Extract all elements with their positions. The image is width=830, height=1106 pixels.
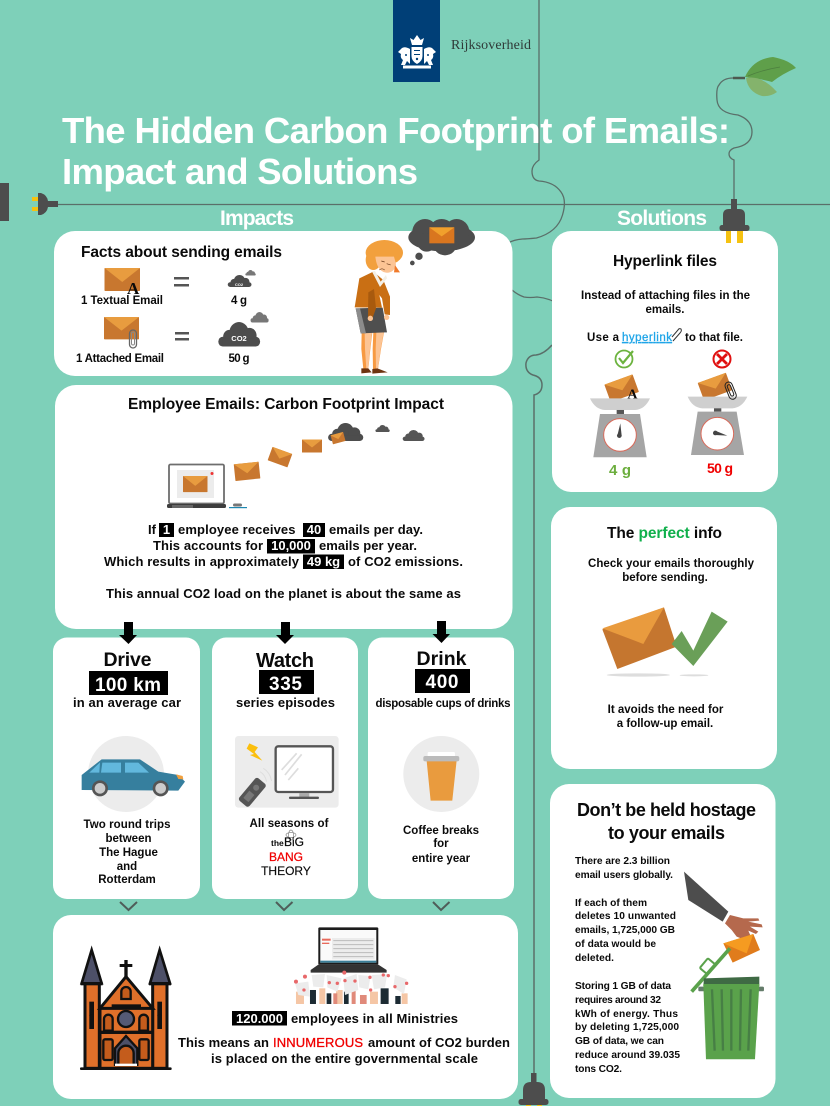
icon: church (80, 950, 172, 1070)
text: email statistics: This annual CO2 load on the planet is about the same as (106, 586, 461, 601)
stat: 335: 335 (269, 674, 302, 695)
text: email data facts: If each of them (575, 898, 647, 909)
title: The Hidden Carbon Footprint of Emails: (62, 110, 730, 151)
panel: drink (368, 638, 514, 899)
text: round trips: Two round trips (84, 819, 170, 831)
panel: employee emails impact (55, 385, 512, 629)
heading: hyperlink files: Hyperlink files (613, 253, 717, 270)
text: round trips: Rotterdam (98, 874, 156, 886)
text: email data facts: deletes 10 unwanted (575, 911, 676, 922)
panel: the perfect info (551, 507, 777, 769)
icon: scale with attached email (688, 373, 747, 455)
text: check emails: Check your emails thoroughly (588, 558, 755, 570)
text: email data facts: by deleting 1,725,000 (575, 1022, 679, 1033)
text: ministries statement: This means an (178, 1035, 269, 1050)
icon: bottom plug (518, 1073, 548, 1106)
text: hyperlink advice: Use a (587, 332, 620, 344)
text: email data facts: deleted. (575, 953, 614, 964)
text: big bang theory: the (271, 838, 284, 848)
text: round trips: and (117, 861, 137, 873)
heading: hostage: to your emails (608, 823, 725, 843)
text: round trips: The Hague (99, 847, 158, 859)
heading: watch: Watch (256, 650, 314, 672)
text: email data facts: email users globally. (575, 870, 673, 881)
text: big bang theory: BANG (269, 850, 303, 864)
heading: drink: Drink (416, 648, 467, 670)
text: avoids follow-up (608, 704, 724, 730)
text: email data facts: Storing 1 GB of data (575, 981, 671, 992)
text: hyperlink advice: hyperlink (622, 332, 672, 344)
text: email statistics: of CO2 emissions. (348, 554, 463, 569)
heading: hostage (577, 800, 756, 843)
text: email statistics: 40 (307, 522, 321, 537)
heading: Impacts: Impacts (220, 207, 294, 230)
text: email statistics: Which results in approximately (104, 554, 300, 569)
row: textual email (81, 268, 256, 307)
arrow: to watch (276, 622, 294, 644)
value: 4 g: 4 g (609, 462, 631, 479)
text: ministries statement: INNUMEROUS (273, 1035, 363, 1050)
text: big bang theory: THEORY (261, 864, 311, 878)
heading: the perfect info: The perfect info (607, 525, 722, 542)
text: ministries statement (178, 1011, 510, 1066)
value: 50 g: 50 g (707, 460, 733, 476)
panel: ministries (53, 915, 518, 1099)
text: round trips (84, 819, 170, 886)
icon: television (235, 736, 339, 808)
icon: coffee cup (403, 736, 479, 812)
text: email data facts: There are 2.3 billion (575, 856, 670, 867)
text: email statistics: If (148, 522, 157, 537)
text: hyperlink advice: to that file. (685, 332, 743, 344)
icon: cross mark (714, 350, 730, 368)
chevron: watch (276, 902, 292, 910)
text: hyperlink advice: Instead of attaching files in the (581, 290, 750, 302)
row: attached email: CO2 (231, 334, 247, 343)
text: email statistics: emails per year. (319, 538, 417, 553)
text: in an average car: in an average car (73, 695, 181, 710)
text: coffee breaks: for (433, 838, 449, 850)
row: textual email: CO2 (235, 282, 244, 287)
icon: laptop (167, 464, 247, 508)
icon: left plug (32, 193, 58, 215)
panel: hyperlink files (552, 231, 778, 492)
illustration: thought cloud (408, 219, 475, 265)
chevron: drive (120, 902, 137, 910)
panel: watch (212, 638, 358, 899)
illustration: hand dropping email into bin (684, 872, 764, 1059)
chevron: drink (433, 902, 450, 910)
stat: 400: 400 (426, 672, 458, 693)
panel: facts about sending emails (54, 219, 512, 376)
icons: clouds (328, 423, 425, 444)
text: email data facts: tons CO2. (575, 1064, 622, 1075)
row: attached email: 50 g (228, 353, 250, 365)
text: coffee breaks: Coffee breaks (403, 825, 479, 837)
text: email statistics: employee receives (178, 522, 296, 537)
arrow: to drink (432, 621, 450, 643)
icon: car (82, 736, 185, 812)
text: ministries statement: amount of CO2 burden (368, 1035, 510, 1050)
row: attached email: 1 Attached Email (76, 353, 164, 365)
stat: 100 km: 100 km (95, 675, 161, 696)
icon: laptop with inbox (311, 927, 387, 973)
text: check emails (588, 558, 755, 584)
text: ministries statement: 120.000 (236, 1011, 283, 1026)
text: email data facts: requires around 32 (575, 995, 661, 1006)
text: ministries statement: employees in all Ministries (291, 1011, 458, 1026)
illustration: worried woman (355, 240, 403, 374)
title: Impact and Solutions (62, 151, 418, 192)
heading: drive: Drive (104, 649, 152, 671)
text: email data facts: reduce around 39.035 (575, 1050, 680, 1061)
text: email statistics: 1 (163, 522, 170, 537)
text: big bang theory: All seasons of (250, 818, 329, 830)
icon: scale with textual email (590, 374, 650, 457)
icon: envelope with check (602, 607, 728, 677)
heading: hostage: Don’t be held hostage (577, 800, 756, 820)
text: big bang theory: BiG (284, 835, 304, 849)
icon: leaf (733, 57, 796, 96)
text: email statistics (104, 522, 463, 601)
stat: 335 (259, 670, 314, 695)
heading: employee emails: Employee Emails: Carbon Footprint Impact (128, 396, 444, 413)
text: round trips: between (105, 833, 152, 845)
row: attached email (76, 312, 269, 365)
text: disposable cups: disposable cups of drinks (376, 698, 510, 710)
panel: drive (53, 638, 200, 899)
icon: top plug (720, 199, 750, 243)
text: coffee breaks: entire year (412, 853, 471, 865)
icon: wall socket (0, 183, 9, 221)
arrow: to drive (119, 622, 137, 644)
text: email data facts: of data would be (575, 939, 656, 950)
text: avoids follow-up: It avoids the need for (608, 704, 724, 716)
text: email statistics: 10,000 (271, 538, 311, 553)
text: big bang theory (250, 818, 329, 878)
text: email data facts: kWh of energy. Thus (575, 1009, 678, 1020)
logo: Rijksoverheid: Rijksoverheid (451, 38, 531, 53)
row: textual email: 4 g (231, 295, 247, 307)
text: email data facts: emails, 1,725,000 GB (575, 925, 675, 936)
icon: check mark (616, 350, 633, 368)
panel: do not be held hostage (550, 784, 776, 1098)
text: email data facts: GB of data, we can (575, 1036, 664, 1047)
text: ministries statement: is placed on the entire governmental scale (211, 1051, 478, 1066)
text: email statistics: emails per day. (329, 522, 423, 537)
icons: flying envelopes (234, 440, 322, 481)
icon: crowd holding mail (294, 971, 408, 1004)
heading: Solutions: Solutions (617, 207, 707, 230)
icon: scale with textual email: A (627, 387, 637, 402)
row: textual email: 1 Textual Email (81, 295, 163, 307)
text: hyperlink advice (581, 290, 750, 344)
text: hyperlink advice: emails. (646, 304, 684, 316)
text: email statistics: This accounts for (153, 538, 263, 553)
text: series episodes: series episodes (236, 695, 335, 710)
text: email data facts (575, 856, 680, 1075)
row: textual email: A (127, 279, 140, 298)
text: coffee breaks (403, 825, 479, 865)
text: email statistics: 49 kg (307, 554, 340, 569)
stat: 400 (415, 669, 470, 693)
text: avoids follow-up: a follow-up email. (617, 718, 713, 730)
text: check emails: before sending. (622, 572, 708, 584)
logo: Rijksoverheid (393, 0, 531, 82)
title (62, 110, 730, 192)
heading: facts: Facts about sending emails (81, 244, 282, 261)
